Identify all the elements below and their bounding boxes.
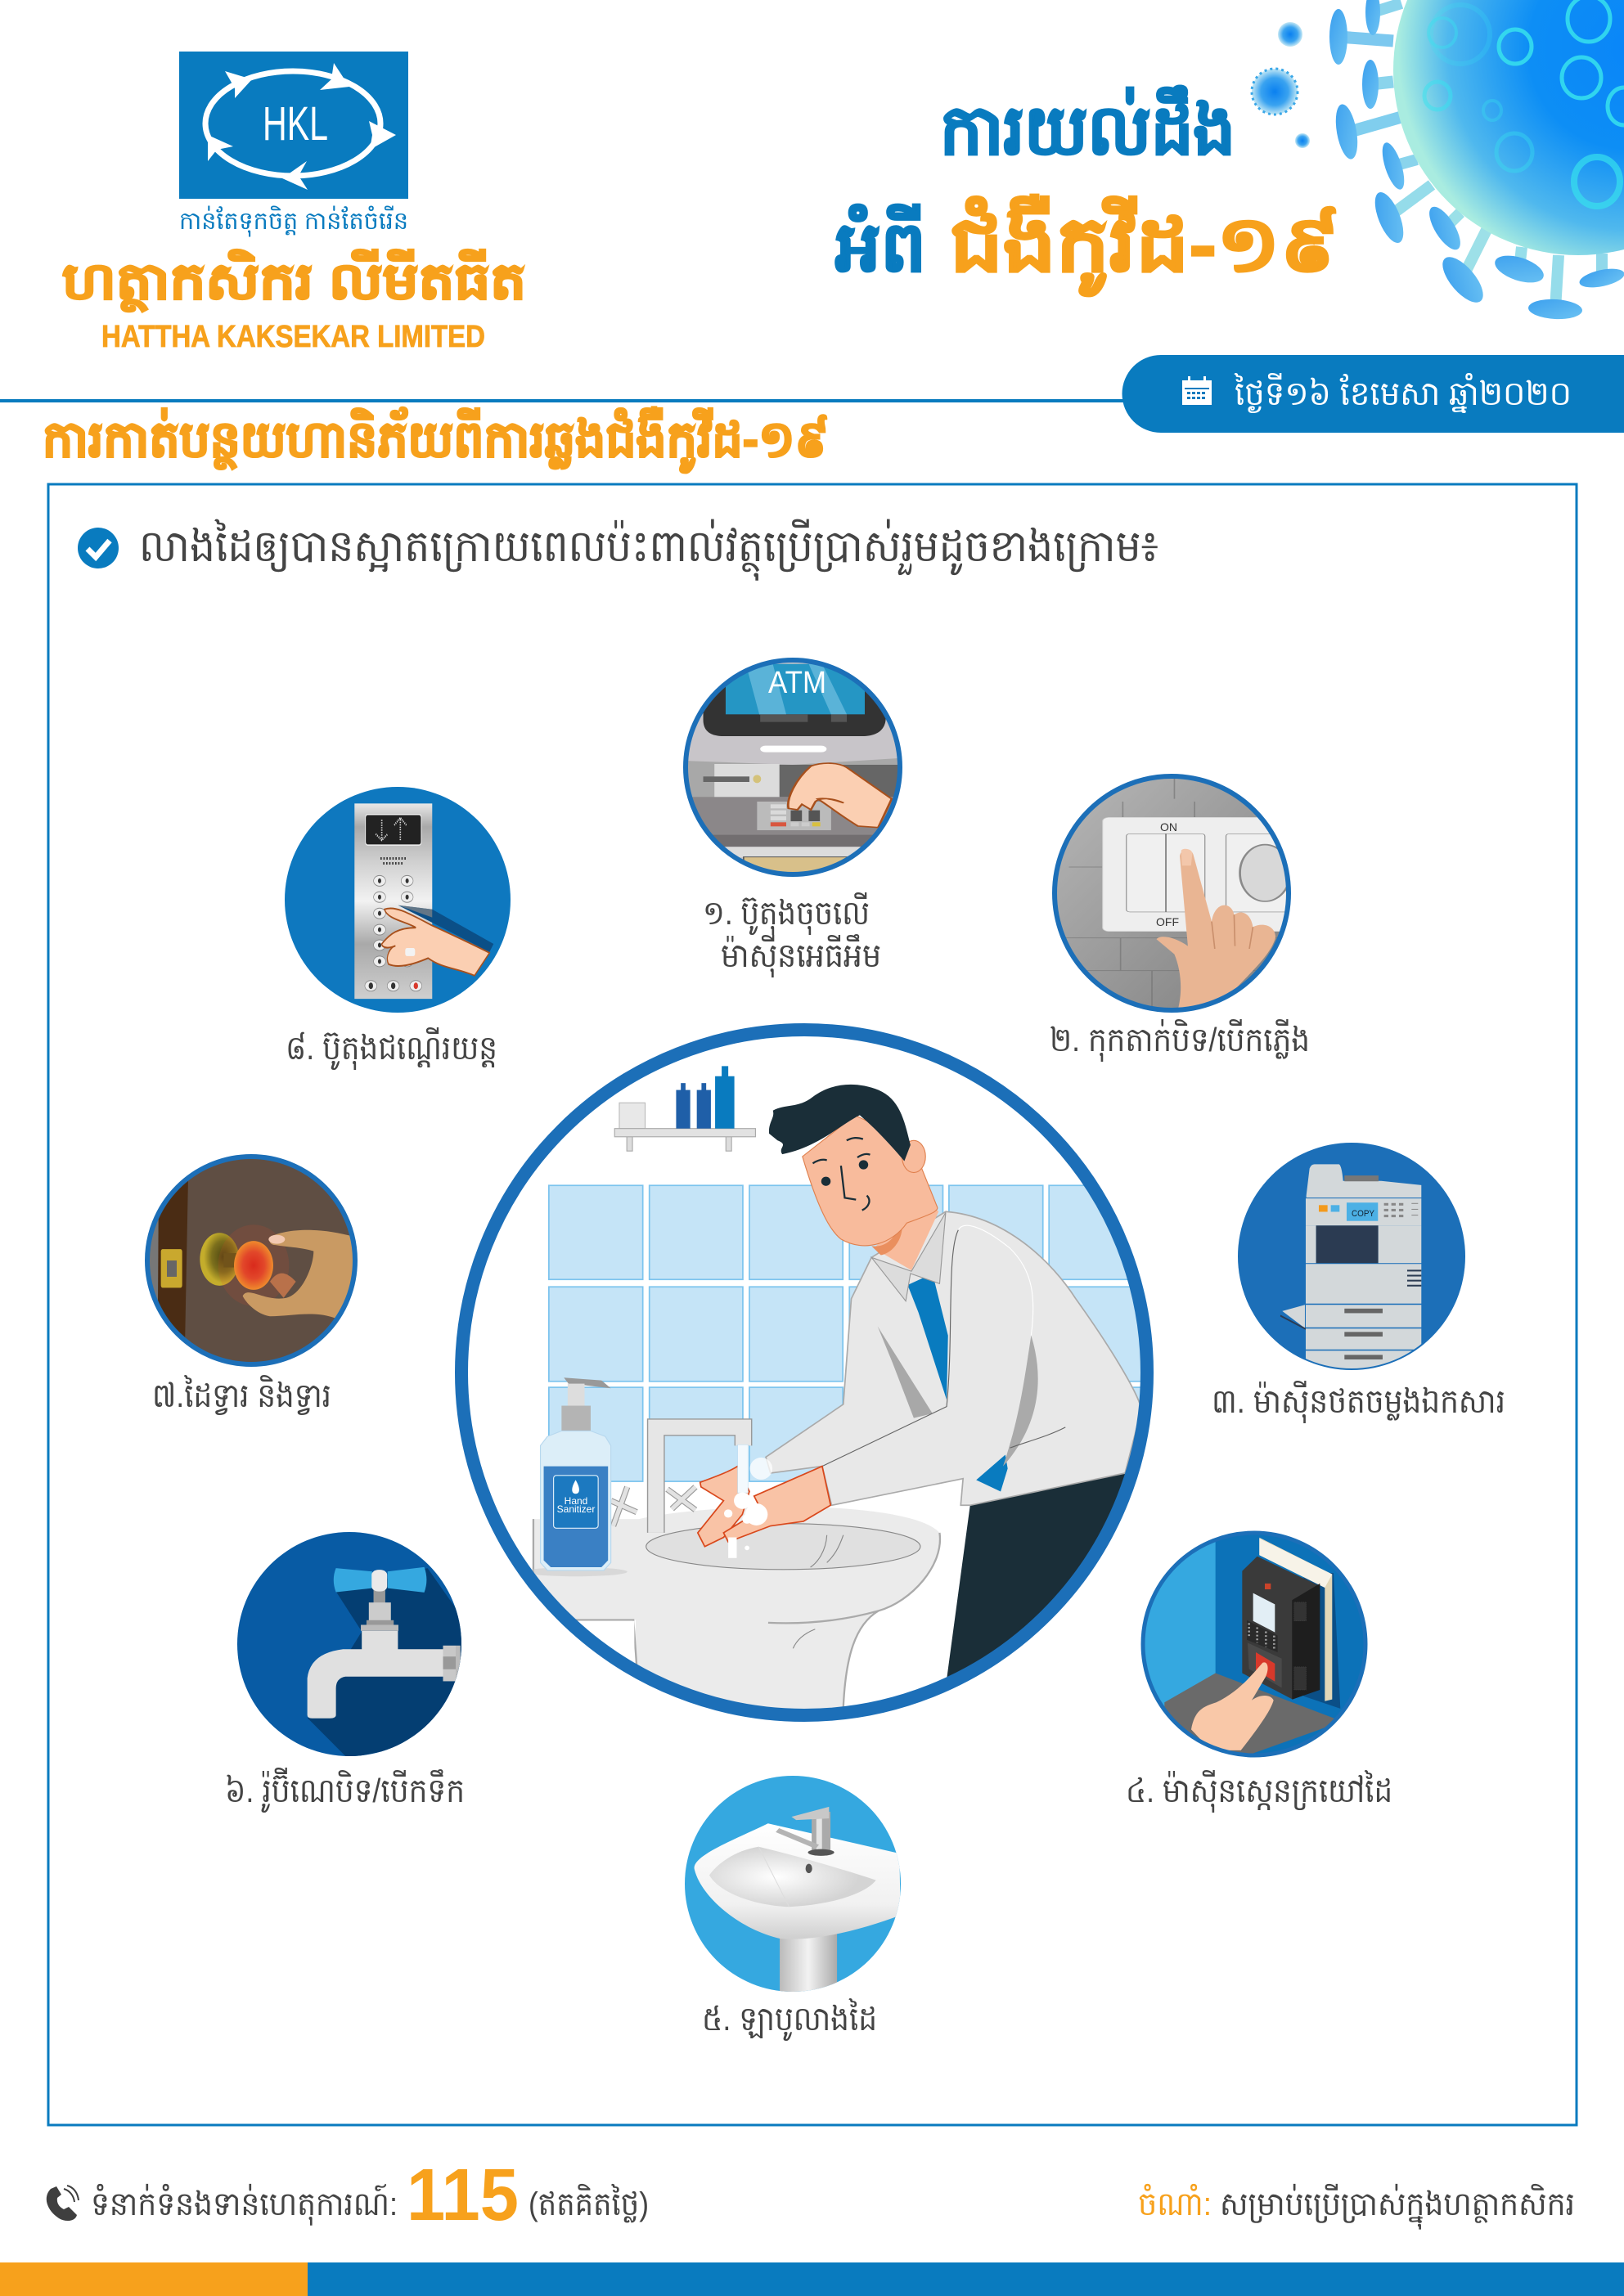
item 5: wash basin <box>685 1776 901 1995</box>
logo: HKL emblem: HKL <box>263 97 328 151</box>
hands <box>698 1467 749 1547</box>
label 6: ៦. រ៉ូប៊ីណេបិទ/បើកទឹក <box>225 1767 465 1813</box>
head <box>803 1115 938 1246</box>
date pill <box>1122 355 1624 433</box>
water stream <box>738 1445 748 1493</box>
section heading: ការកាត់បន្ថយហានិភ័យពីការឆ្លងជំងឺកូវីដ-១៩ <box>43 407 829 474</box>
title line 2: about: អំពី <box>835 204 926 285</box>
wall tiles <box>549 1185 1143 1481</box>
label 1: ១. ប៊ូតុងចុចលើ <box>703 892 870 936</box>
circle ring <box>461 1030 1147 1715</box>
switch text: ON <box>1160 820 1177 833</box>
title line 1: ការយល់ដឹង <box>940 85 1235 168</box>
header divider line <box>0 399 1145 402</box>
note text: សម្រាប់ប្រើប្រាស់ក្នុងហត្ថាកសិករ <box>1220 2183 1575 2230</box>
virus body <box>1393 0 1624 255</box>
virus illustration <box>1252 0 1624 321</box>
virus spikes <box>1329 0 1624 321</box>
icon: calendar <box>1182 376 1212 405</box>
note label: ចំណាំ: <box>1138 2183 1212 2222</box>
faucet <box>611 1427 744 1533</box>
footer bar <box>0 2262 1624 2296</box>
sanitizer bottle <box>524 1377 628 1576</box>
item 1: ATM keypad <box>678 654 907 881</box>
virus rings <box>1424 0 1624 206</box>
ATM screen text: ATM <box>768 666 826 700</box>
face features <box>812 1138 870 1211</box>
shelf with bottles <box>614 1066 755 1151</box>
hotline text: ទំនាក់ទំនងទាន់ហេតុការណ៍: <box>91 2183 398 2226</box>
hotline number: 115 <box>407 2154 519 2236</box>
main panel frame <box>48 484 1577 2125</box>
collar <box>871 1212 946 1301</box>
tie <box>907 1274 948 1400</box>
item 8: elevator buttons <box>285 787 511 1013</box>
bottle label <box>557 1495 595 1515</box>
logo tagline: កាន់តែទុកចិត្ត កាន់តែចំរើន <box>179 205 408 237</box>
hair <box>769 1085 911 1161</box>
free of charge note: (ឥតគិតថ្លៃ) <box>529 2183 649 2223</box>
date text: ថ្ងៃទី១៦ ខែមេសា ឆ្នាំ២០២០ <box>1234 372 1572 414</box>
copier text: COPY <box>1352 1209 1375 1219</box>
shirt <box>766 1211 1141 1505</box>
label 3: ៣. ម៉ាស៊ីនថតចម្លងឯកសារ <box>1212 1380 1505 1424</box>
item 3: copier <box>1238 1143 1465 1372</box>
neck <box>874 1210 939 1270</box>
soap foam <box>724 1458 772 1558</box>
label 7: ៧.ដៃទ្វារ និងទ្វារ <box>152 1374 331 1416</box>
switch text <box>1156 820 1179 928</box>
label 1: ម៉ាស៊ីនអេធីអឹម <box>721 933 881 978</box>
label 1 <box>703 892 881 978</box>
icon: phone <box>47 2186 79 2221</box>
item 4: fingerprint scanner <box>1140 1530 1368 1759</box>
item 6: water tap <box>237 1532 465 1759</box>
shirt shadow <box>878 1326 933 1418</box>
sink <box>533 1507 940 1731</box>
label 4: ៤. ម៉ាស៊ីនស្កេនក្រយៅដៃ <box>1126 1769 1392 1813</box>
label 2: ២. កុកតាក់បិទ/បើកភ្លើង <box>1050 1018 1310 1063</box>
company name Khmer: ហត្ថាកសិករ លីមីតធីត <box>62 249 526 312</box>
switch text: OFF <box>1156 915 1179 928</box>
item 2: light switch <box>1051 773 1296 1014</box>
bottle label: Sanitizer <box>557 1503 595 1515</box>
label 8: ៨. ប៊ូតុងជណ្តើរយន្ត <box>286 1027 497 1071</box>
item 7: door knob <box>142 1152 360 1371</box>
icon: check mark <box>78 528 119 568</box>
central illustration: man washing hands <box>461 1030 1174 1731</box>
title line 2: COVID-19: ជំងឺកូវីដ-១៩ <box>950 194 1339 297</box>
company name Latin: HATTHA KAKSEKAR LIMITED <box>101 320 485 354</box>
instruction text: លាងដៃឲ្យបានស្អាតក្រោយពេលប៉ះពាល់វត្ថុប្រើប្រាស់រួមដូចខាងក្រោម៖ <box>139 519 1158 581</box>
bottle label: Hand <box>565 1495 587 1507</box>
label 5: ៥. ឡាបូលាងដៃ <box>702 1997 877 2042</box>
trousers <box>947 1474 1125 1677</box>
logo: HKL emblem <box>179 52 408 199</box>
small virus particles <box>1278 22 1302 47</box>
